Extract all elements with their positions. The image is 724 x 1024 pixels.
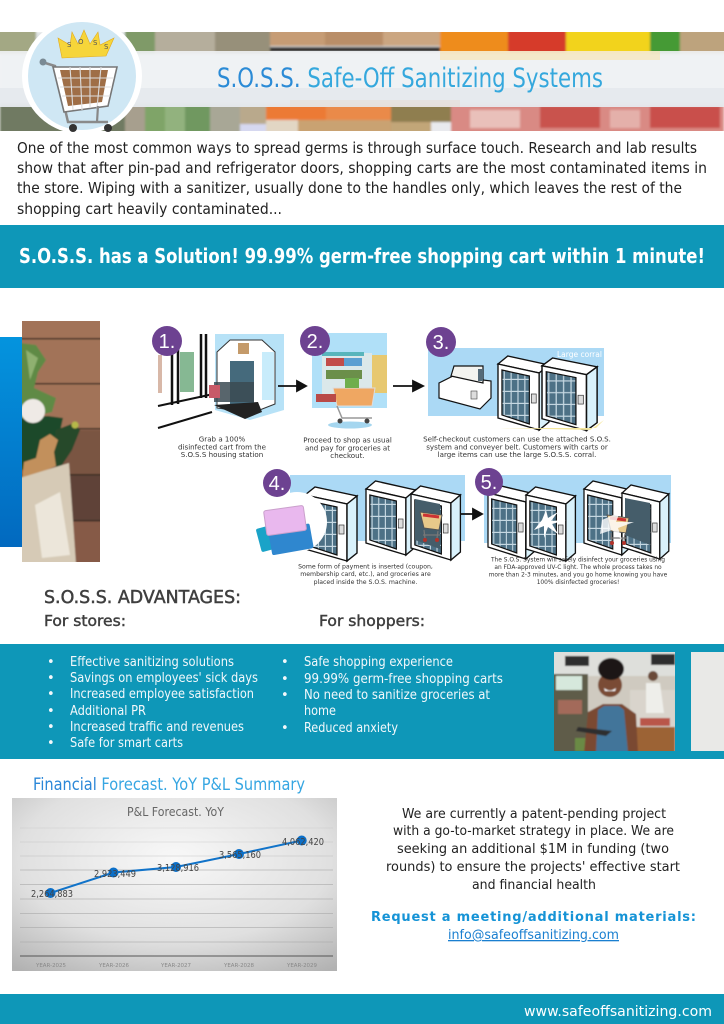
shoppers list: • (281, 655, 289, 670)
step 3 illustration (428, 348, 604, 431)
line chart (12, 798, 337, 971)
stores list: • (47, 704, 55, 719)
step 2 caption: Proceed to shop as usual (303, 436, 392, 444)
advantages panel (0, 644, 724, 759)
stores list: Savings on employees' sick days (70, 671, 258, 686)
data labels: 2,264,883 (31, 889, 73, 900)
year labels: YEAR-2027 (160, 963, 191, 969)
data points (46, 836, 307, 898)
step 5 (475, 468, 671, 586)
step 3 caption (423, 434, 611, 459)
shoppers list: • (281, 672, 289, 687)
footer bar (0, 994, 724, 1024)
footer bar: www.safeoffsanitizing.com (524, 1004, 712, 1020)
step 1 caption: disinfected cart from the (178, 442, 266, 452)
title: S.O.S.S. Safe-Off Sanitizing Systems (217, 63, 603, 94)
translucent title band (0, 51, 724, 107)
arrow 1 to 2 (278, 381, 306, 391)
step 4 number badge: 4. (269, 473, 285, 495)
shoppers list (281, 655, 503, 736)
data line (50, 840, 302, 893)
data labels (31, 837, 324, 900)
funding text: seeking an additional $1M in funding (two (397, 842, 669, 857)
step 4 (256, 469, 465, 586)
step 3 illustration: Large corral (557, 350, 602, 359)
year labels (35, 963, 317, 969)
shoppers list: No need to sanitize groceries at (304, 688, 490, 703)
intro paragraph: the store. Wiping with a sanitizer, usually done to the handles only, which leaves the rest of the (17, 179, 682, 197)
step 5 caption: more than 2-3 minutes, and you go home knowing you have (489, 572, 668, 578)
step 5 caption: an FDA-approved UV-C light. The whole process takes no (494, 565, 662, 571)
data labels: 3,565,160 (219, 850, 261, 861)
stores list: • (47, 736, 55, 751)
shoppers list: 99.99% germ-free shopping carts (304, 672, 503, 687)
stores list: • (47, 671, 55, 686)
stores list: • (47, 655, 55, 670)
year labels: YEAR-2029 (286, 963, 317, 969)
stores list: Safe for smart carts (70, 736, 183, 751)
step 5 caption (489, 558, 668, 586)
stores list: Increased employee satisfaction (70, 687, 254, 702)
step 3 number badge: 3. (433, 332, 449, 354)
stores list: • (47, 687, 55, 702)
for stores label: For stores: (44, 612, 126, 630)
step 2 caption: and pay for groceries at (305, 444, 390, 452)
shoppers list: • (281, 688, 289, 703)
step 3 caption: Self-checkout customers can use the attached S.O.S. (423, 434, 611, 444)
logo circle with cart: S (93, 39, 98, 47)
photo: smiling shop worker (552, 650, 677, 754)
step 1 illustration (158, 334, 284, 428)
data labels: 4,062,420 (282, 837, 324, 848)
funding text: We are currently a patent-pending project (402, 807, 666, 822)
for shoppers label: For shoppers: (319, 612, 425, 630)
funding text: and financial health (472, 878, 596, 893)
blue accent block (0, 337, 22, 547)
chart heading: Financial Forecast. YoY P&L Summary (33, 775, 305, 795)
header banner (0, 18, 724, 134)
funding text: rounds) to ensure the projects' effective start (386, 860, 680, 875)
call to action: Request a meeting/additional materials: (371, 910, 696, 925)
data labels: 3,128,916 (157, 863, 199, 874)
produce photo strip (0, 30, 724, 134)
step 2 number badge: 2. (307, 331, 323, 353)
step 1 caption (178, 434, 266, 459)
step 5 number badge: 5. (481, 472, 497, 494)
year labels: YEAR-2028 (223, 963, 254, 969)
year labels: YEAR-2025 (35, 963, 66, 969)
logo circle with cart: O (78, 38, 84, 46)
chart title: P&L Forecast. YoY (127, 805, 225, 819)
logo circle with cart: S (104, 43, 109, 51)
step 5 caption: The S.O.S. System will safely disinfect your groceries using (490, 558, 665, 564)
stores list: Additional PR (70, 704, 146, 719)
step 3 number badge (426, 327, 456, 357)
step 1 (152, 326, 284, 459)
gridlines (20, 828, 333, 942)
step 2 caption: checkout. (330, 451, 365, 460)
shoppers list: Reduced anxiety (304, 721, 398, 736)
stores list (47, 655, 258, 751)
call to action (371, 910, 696, 943)
step 4 caption (298, 564, 433, 586)
step 2 caption (303, 436, 392, 460)
step 3 caption: system and conveyer belt. Customers with carts or (426, 442, 608, 452)
step 4 caption: membership card, etc.), and groceries are (300, 571, 431, 578)
stores list: Effective sanitizing solutions (70, 655, 234, 670)
shoppers list: • (281, 721, 289, 736)
step 5 number badge (475, 468, 503, 496)
step 5 caption: 100% disinfected groceries! (537, 580, 619, 586)
step 3 (423, 327, 611, 459)
data labels: 2,923,449 (94, 869, 136, 880)
solution banner (0, 225, 724, 288)
step 4 caption: placed inside the S.O.S. machine. (314, 579, 417, 586)
step 4 illustration (256, 475, 465, 561)
intro paragraph (17, 139, 707, 218)
call to action: info@safeoffsanitizing.com (448, 928, 619, 943)
photo: vegetables in bag on wood (20, 319, 102, 564)
step 1 caption: S.O.S.S housing station (181, 450, 263, 459)
stores list: Increased traffic and revenues (70, 720, 244, 735)
step 2 illustration (312, 333, 387, 428)
arrow 4 to 5 (461, 509, 482, 519)
gray block (691, 652, 724, 751)
funding text (386, 807, 680, 893)
step 4 number badge (263, 469, 291, 497)
step 1 number badge: 1. (159, 331, 175, 353)
step 5 illustration (484, 475, 671, 561)
intro paragraph: shopping cart heavily contaminated... (17, 200, 282, 218)
shoppers list: Safe shopping experience (304, 655, 453, 670)
step 1 caption: Grab a 100% (199, 434, 245, 444)
logo circle with cart: S (67, 41, 72, 49)
stores list: • (47, 720, 55, 735)
step 4 caption: Some form of payment is inserted (coupon, (298, 564, 433, 570)
step 3 caption: large items can use the large S.O.S.S. corral. (438, 450, 596, 459)
arrow 2 to 3 (393, 381, 423, 391)
year labels: YEAR-2026 (98, 963, 129, 969)
step 2 (300, 326, 392, 460)
advantages heading: S.O.S.S. ADVANTAGES: (44, 587, 241, 608)
shoppers list: home (304, 704, 336, 719)
funding text: with a go-to-market strategy in place. We are (393, 824, 674, 839)
logo circle with cart (22, 18, 142, 134)
